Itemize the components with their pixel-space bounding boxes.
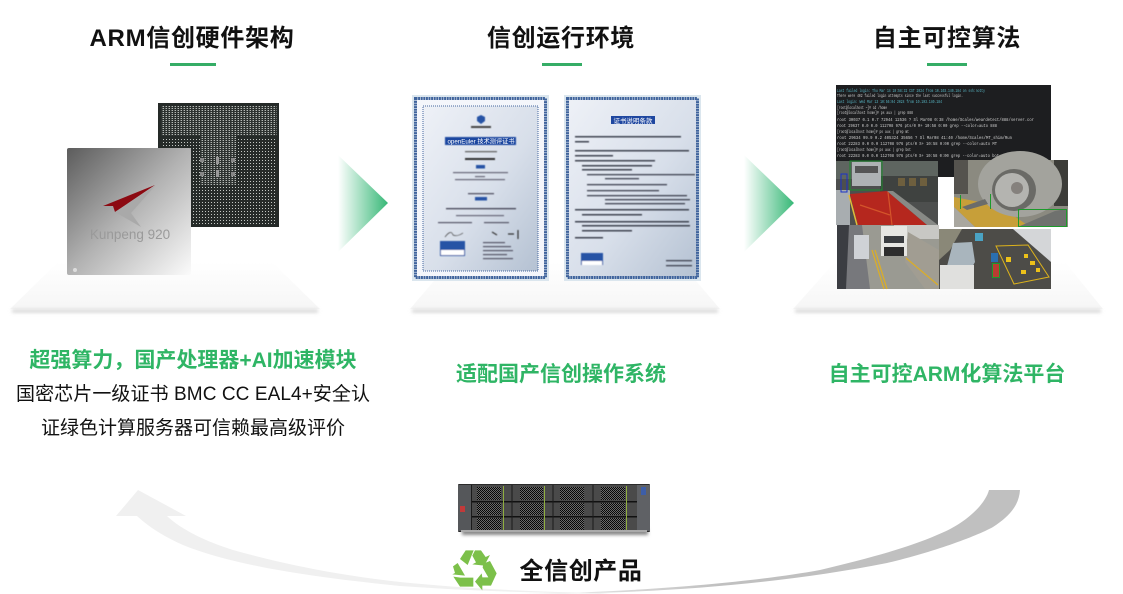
green headline: 自主可控ARM化算法平台 <box>829 362 1065 386</box>
heading: algorithm <box>873 25 1021 66</box>
description <box>16 383 370 439</box>
chip front: Kunpeng 920 <box>90 227 170 242</box>
photo: weighbridge <box>836 161 938 225</box>
terminal screenshot: root 29637 0.0 0.0 112708 976 pts/0 R+ 10:58 0:00 grep --color=auto 888 <box>837 123 997 129</box>
terminal screenshot: [root@localhost home]# ps aux | grep 888 <box>837 110 913 116</box>
heading: runtime <box>487 25 635 66</box>
photo: truck on ramp <box>837 225 939 289</box>
arrow: chevron 1 <box>338 155 388 252</box>
panel: algorithm <box>793 25 1103 386</box>
heading: ARM hardware <box>90 25 294 66</box>
terminal screenshot <box>836 85 1051 177</box>
certificate right <box>564 95 701 281</box>
photo: tire <box>954 151 1068 227</box>
terminal screenshot: Last login: Wed Mar 13 10:56:04 2024 from 10.103.140.184 <box>837 99 942 105</box>
heading: ARM hardware: ARM信创硬件架构 <box>90 25 294 52</box>
platform shadow <box>793 262 1103 312</box>
heading: runtime: 信创运行环境 <box>487 25 635 52</box>
arrow: cycle left <box>116 490 610 594</box>
icon: recycle <box>452 550 497 590</box>
terminal screenshot: root 22283 0.0 0.0 112708 976 pts/0 S+ 10:58 0:00 grep --color=auto MT <box>837 141 997 147</box>
panel: ARM hardware <box>10 25 370 439</box>
terminal screenshot: [root@localhost home]# ps aux | grep bot <box>837 147 911 153</box>
terminal screenshot: [root@localhost home]# ps aux | grep mt <box>837 129 909 135</box>
platform shadow <box>410 262 720 312</box>
certificate left: openEuler 技术测评证书 <box>447 138 515 146</box>
terminal screenshot: root 30037 0.1 0.7 72944 12536 ? Sl Mar08 0:38 /home/Scales/weardetect/888/server.cor <box>837 117 1034 123</box>
panel: runtime environment <box>410 25 720 386</box>
terminal screenshot: Last failed login: Thu Mar 14 10:58:32 CST 2024 from 10.103.140.184 on ssh:notty <box>837 88 985 94</box>
certificate left <box>412 95 549 281</box>
certificate right: 证书说明条款 <box>614 116 653 125</box>
green headline: 适配国产信创操作系统 <box>456 362 666 386</box>
platform shadow <box>10 262 320 312</box>
terminal screenshot: root 22283 0.0 0.0 112708 976 pts/0 S+ 10:58 0:00 grep --color=auto bot <box>837 153 999 159</box>
description: 证绿色计算服务器可信赖最高级评价 <box>41 417 345 439</box>
arrow: cycle right <box>520 490 1020 594</box>
green headline: 超强算力，国产处理器+AI加速模块 <box>29 349 357 372</box>
terminal screenshot: There were 402 failed login attempts since the last successful login. <box>837 93 963 99</box>
chip back <box>158 103 279 227</box>
heading: algorithm: 自主可控算法 <box>873 25 1021 52</box>
server <box>458 484 650 535</box>
chip front <box>67 148 191 275</box>
description: 国密芯片一级证书 BMC CC EAL4+安全认 <box>16 383 370 405</box>
terminal screenshot: [root@localhost ~]# cd /home <box>837 105 887 111</box>
arrow: chevron 2 <box>744 155 794 252</box>
terminal screenshot: root 29634 99.9 0.2 405324 35656 ? Sl Mar08 41:40 /home/Scales/MT_shim/Run <box>837 135 1012 141</box>
photo: work area <box>939 229 1051 289</box>
label: all products: 全信创产品 <box>520 558 642 585</box>
